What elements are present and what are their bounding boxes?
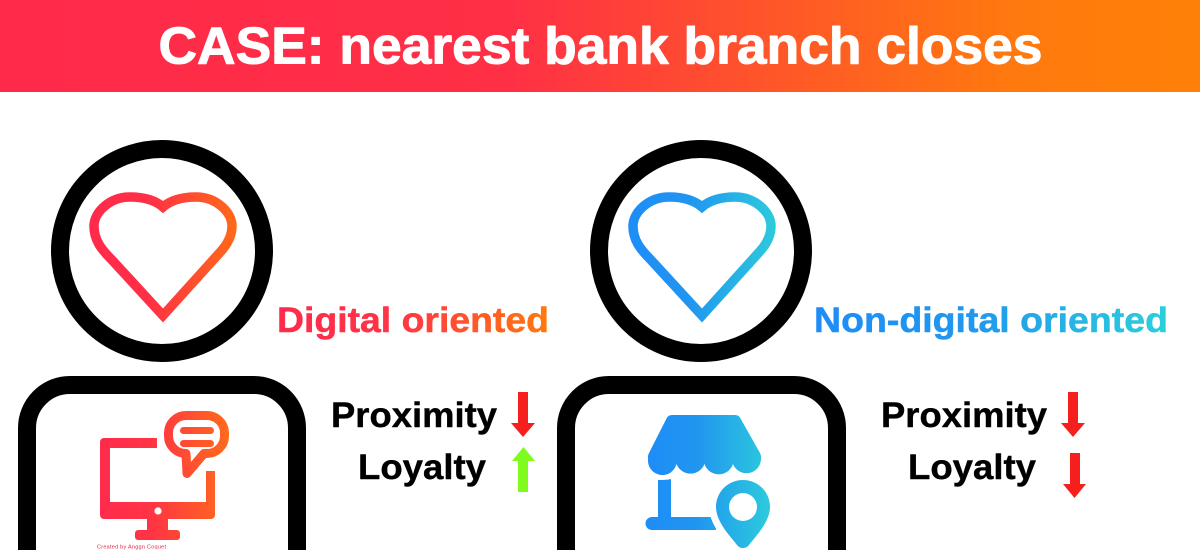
- label: digital oriented: Digital oriented: [277, 301, 549, 340]
- label: proximity: Proximity: [331, 396, 498, 435]
- panel: digital oriented person: [27, 149, 297, 550]
- header banner: [0, 0, 1200, 92]
- icon: storefront with location pin: [646, 415, 770, 548]
- label: non-digital oriented: Non-digital oriented: [814, 301, 1168, 340]
- metrics: digital oriented: [331, 392, 535, 492]
- metrics: non-digital oriented: [881, 392, 1086, 498]
- person body: digital: [27, 385, 297, 550]
- title: CASE: nearest bank branch closes: [158, 18, 1042, 76]
- arrow: loyalty down: [1063, 453, 1086, 498]
- person head: digital: [60, 149, 264, 353]
- arrow: loyalty up: [512, 447, 535, 492]
- panel: non-digital oriented person: [566, 149, 837, 550]
- arrow: proximity down: [511, 392, 535, 437]
- label: loyalty: Loyalty: [908, 448, 1037, 487]
- person head: non-digital: [599, 149, 803, 353]
- label: proximity: Proximity: [881, 396, 1048, 435]
- icon: blue heart: [633, 197, 771, 316]
- arrow: proximity down: [1061, 392, 1085, 437]
- person body: non-digital: [566, 385, 837, 550]
- icon: monitor with chat bubble: [100, 416, 224, 540]
- icon: red heart: [94, 197, 232, 316]
- label: loyalty: Loyalty: [358, 448, 487, 487]
